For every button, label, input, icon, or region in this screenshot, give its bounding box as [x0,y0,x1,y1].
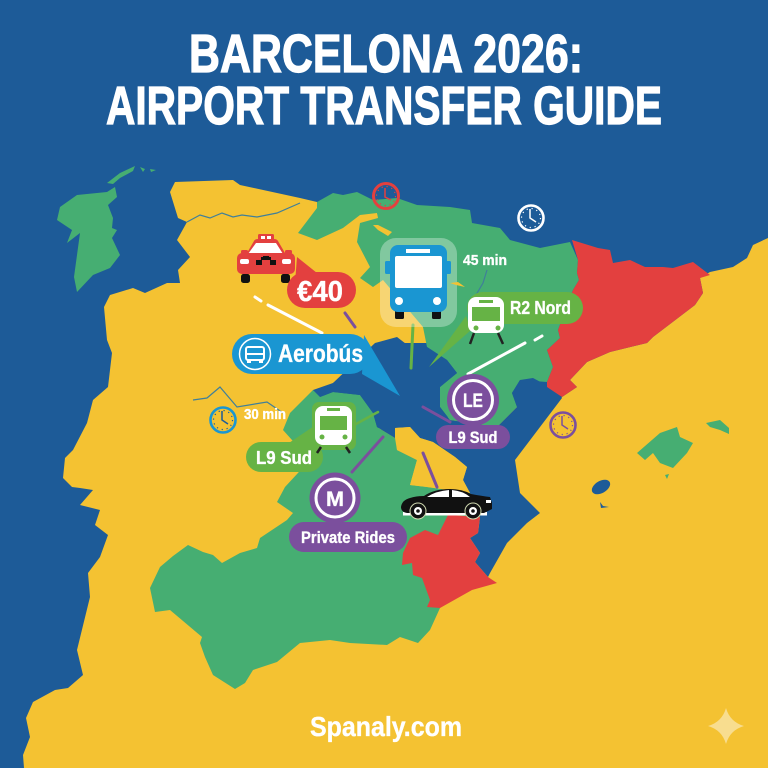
region: northern green [298,192,579,427]
route lines [255,297,542,487]
icon: clock blue [210,408,236,432]
callout: price 40 euros [287,257,356,308]
icon: taxi [237,234,295,283]
callout: R2 Nord [429,292,583,367]
region: central and eastern blue [320,337,562,577]
callout: price 40 euros: €40 [297,276,343,308]
badge: LE L9 Sud: L9 Sud [448,429,498,447]
title: BARCELONA 2026: [189,24,583,84]
region: Murcia red [402,515,497,608]
badge: M Private Rides: M [326,488,344,511]
region: Balearic islands [589,420,729,508]
region: mainland yellow [23,180,768,768]
icon: clock purple [550,412,576,438]
badge: LE L9 Sud [436,374,510,449]
callout: L9 Sud green: L9 Sud [256,448,312,468]
icon: bus [373,225,465,327]
map of Spain [23,166,768,768]
badge: M Private Rides [289,472,407,552]
region: Galicia green [57,187,120,292]
callout: L9 Sud green [246,402,356,472]
region: Galicia islets [107,166,156,184]
icon: sparkle [708,708,744,744]
callout: Aerobús [232,334,400,396]
icon: train green [468,297,504,344]
label: 45 min: 45 min [463,252,507,269]
callout: R2 Nord: R2 Nord [510,298,571,318]
icon: private car [401,489,492,519]
title [106,24,662,136]
region: Catalonia red [547,240,710,397]
icon: clock red [374,184,398,208]
badge: LE L9 Sud: LE [463,391,483,412]
badge: M Private Rides: Private Rides [301,528,395,547]
rivers [187,203,487,413]
icon: clock white [518,206,544,230]
label: 30 min: 30 min [244,407,286,423]
callout: Aerobús: Aerobús [278,340,363,368]
icon: train white [312,402,356,453]
region: southern green [150,390,480,689]
footer brand: Spanaly.com [310,711,462,742]
region: inner yellow [395,427,470,493]
icon: bus in circle [240,338,270,370]
